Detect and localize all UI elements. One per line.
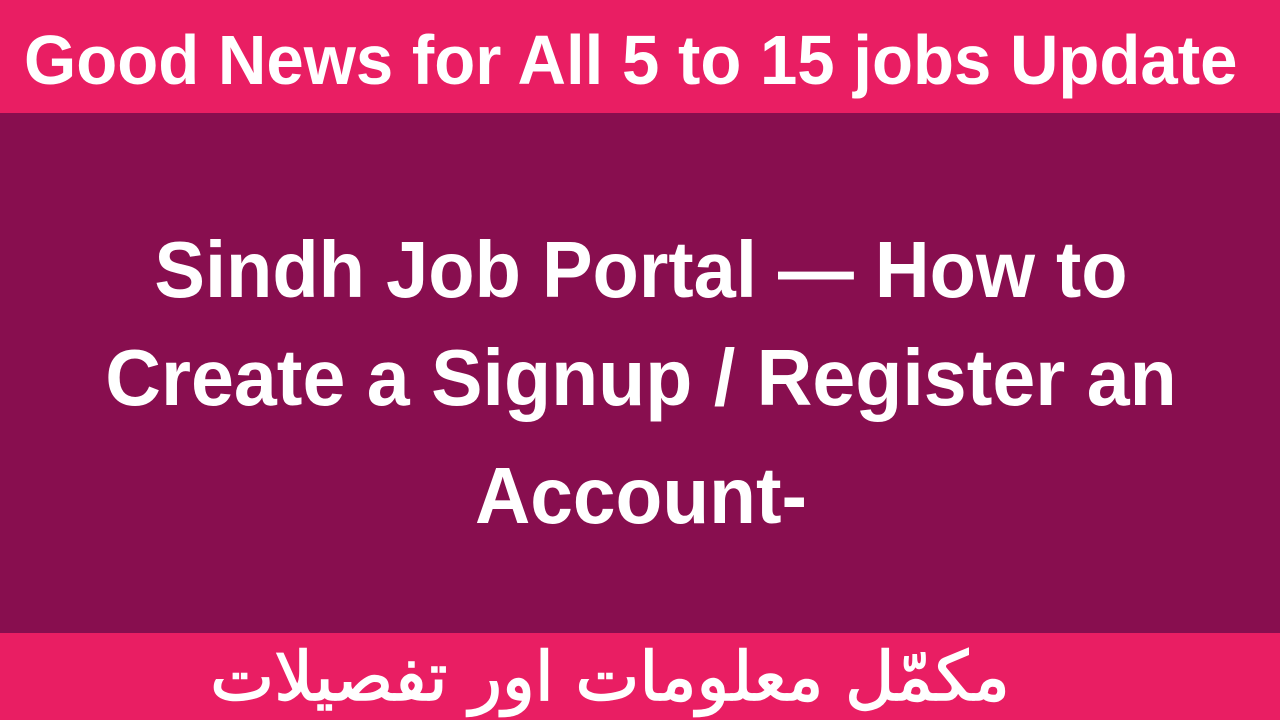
main title line 3: Account- [475, 451, 807, 540]
bottom banner [0, 633, 1280, 720]
main title line 2: Create a Signup / Register an [105, 333, 1177, 422]
top banner [0, 0, 1280, 113]
urdu caption: مکمّل معلومات اور تفصیلات [210, 638, 1010, 717]
main title line 1: Sindh Job Portal — How to [154, 225, 1128, 314]
main panel [0, 113, 1280, 633]
top headline: Good News for All 5 to 15 jobs Update [24, 21, 1237, 99]
